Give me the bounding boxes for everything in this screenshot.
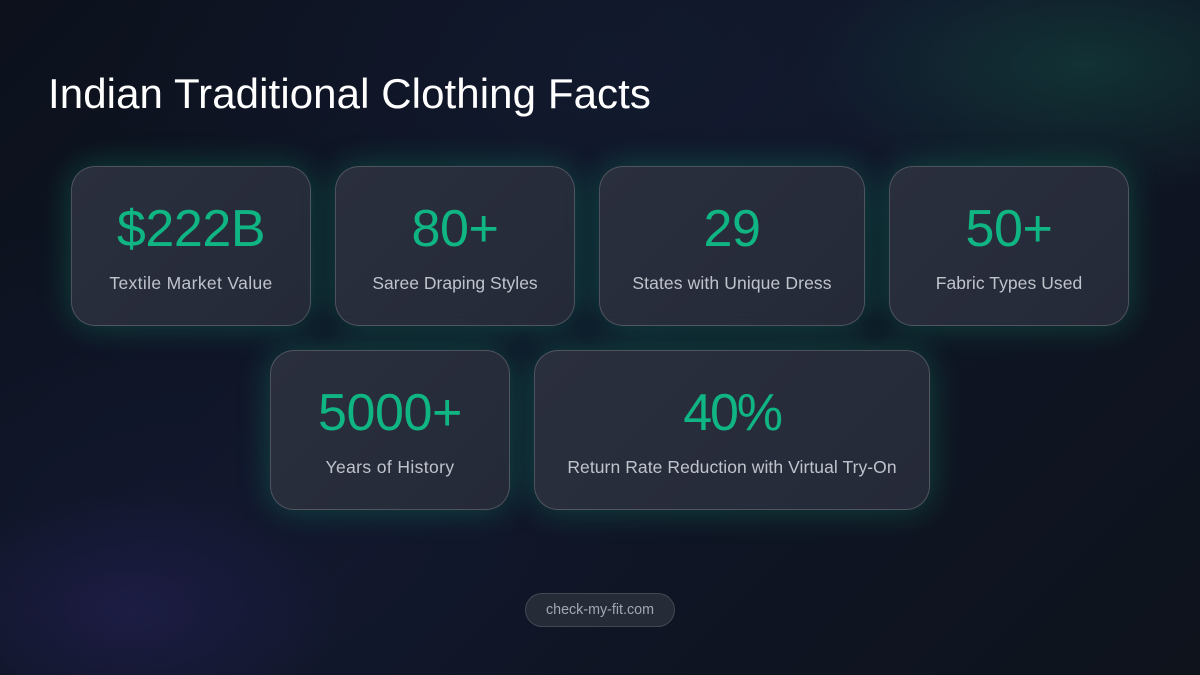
card: return rate reduction: Return Rate Reduction with Virtual Try-On [567, 457, 897, 477]
card: fabric types used: Fabric Types Used [936, 273, 1082, 293]
card: states with unique dress: States with Unique Dress [632, 273, 832, 293]
card: saree draping styles: Saree Draping Styles [372, 273, 538, 293]
card: textile market value: Textile Market Value [109, 273, 273, 293]
card: states with unique dress: 29 [703, 200, 761, 258]
card: fabric types used: 50+ [965, 200, 1052, 258]
card: years of history: 5000+ [318, 384, 462, 442]
card: return rate reduction: 40% [683, 384, 781, 442]
card: years of history [270, 350, 510, 510]
card: return rate reduction [534, 350, 930, 510]
title: Indian Traditional Clothing Facts [48, 70, 651, 117]
website pill: check-my-fit.com [546, 602, 654, 618]
card: years of history: Years of History [326, 457, 454, 477]
card: textile market value: $222B [117, 200, 265, 258]
website pill [525, 593, 675, 627]
card: fabric types used [889, 166, 1129, 326]
card: saree draping styles [335, 166, 575, 326]
card: saree draping styles: 80+ [411, 200, 498, 258]
card: states with unique dress [599, 166, 865, 326]
card: textile market value [71, 166, 311, 326]
